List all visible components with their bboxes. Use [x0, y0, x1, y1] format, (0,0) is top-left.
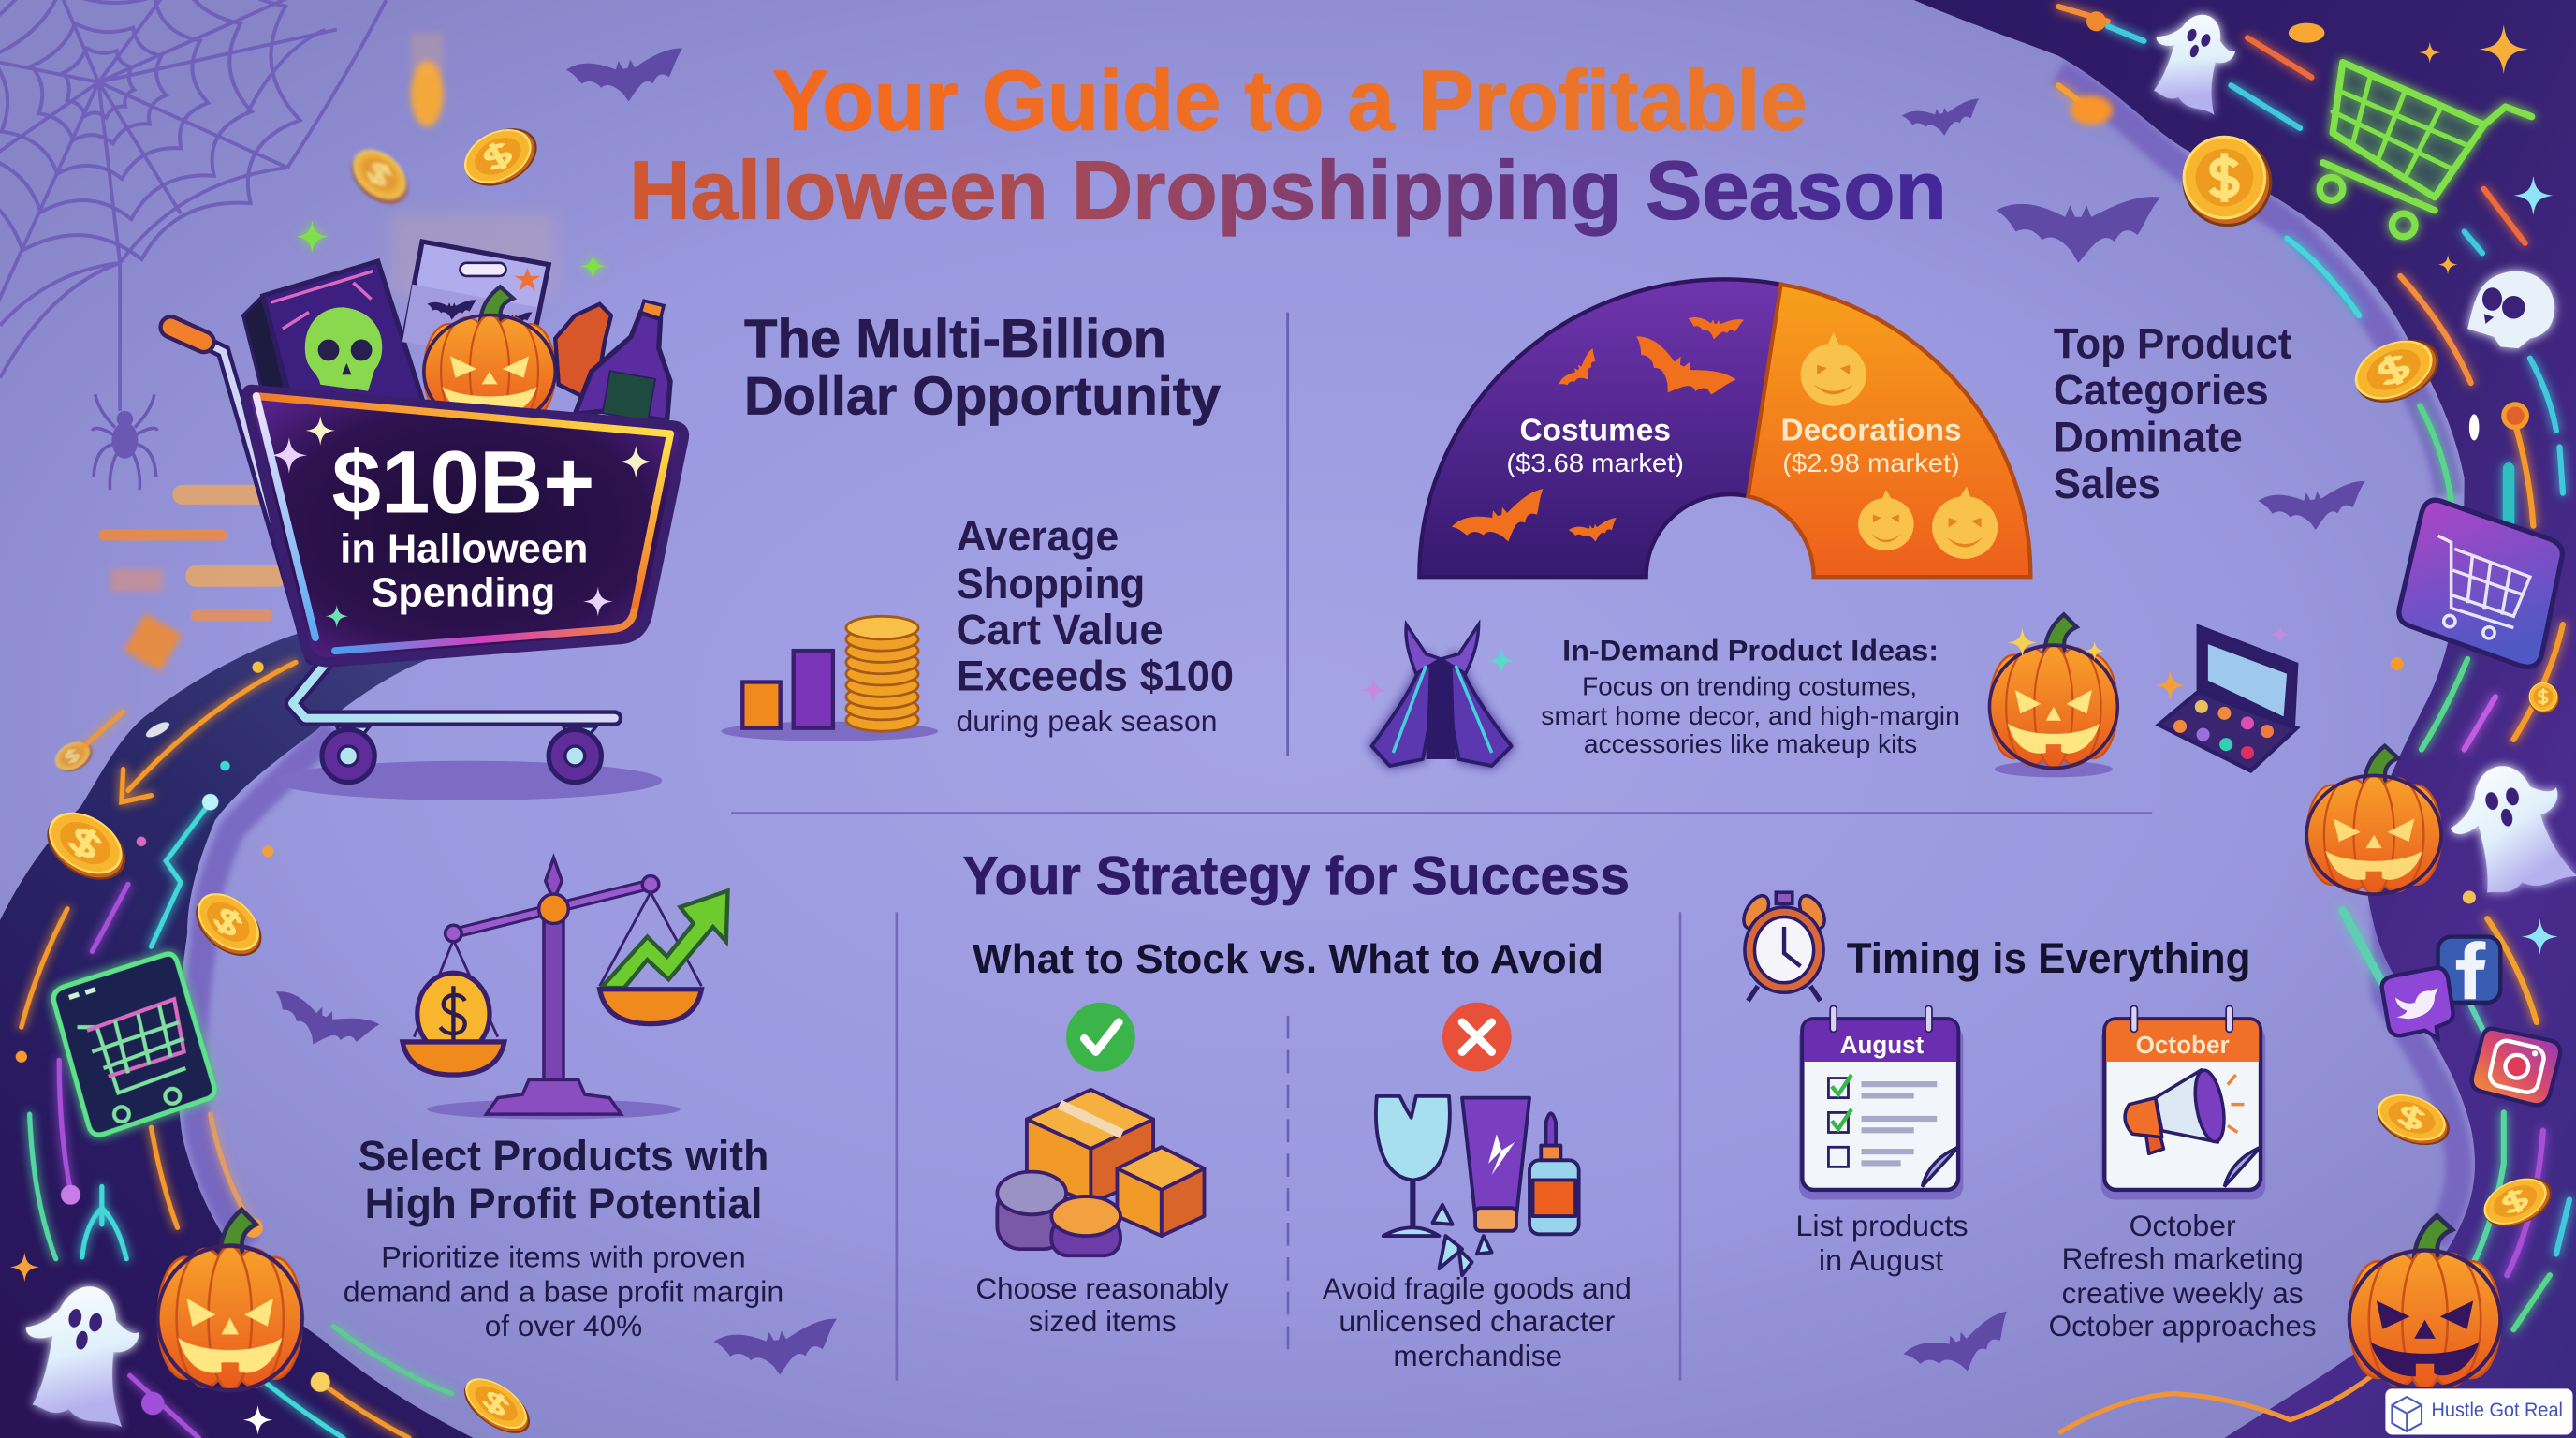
label: decorations: Decorations — [1781, 413, 1962, 448]
text: select products: of over 40% — [485, 1309, 642, 1343]
column dividers — [896, 912, 1681, 1381]
heading: timing: Timing is Everything — [1847, 934, 2250, 982]
stat: shopping cart value: during peak season — [956, 704, 1218, 738]
text: in-demand product ideas: Focus on trending costumes, — [1582, 672, 1917, 701]
cart contents — [243, 242, 670, 428]
calendar: august — [1799, 1005, 1963, 1199]
heading: strategy for success: Your Strategy for Success — [962, 846, 1630, 906]
speed lines — [98, 485, 287, 672]
heading: multi-billion opportunity: The Multi-Billion — [744, 309, 1166, 369]
text: choose reasonably: Choose reasonably — [976, 1271, 1229, 1305]
heading: top product categories: Categories — [2054, 366, 2269, 414]
text: select products: High Profit Potential — [365, 1180, 762, 1227]
icon: makeup palette — [2156, 624, 2297, 770]
text: in-demand product ideas: accessories like makeup kits — [1584, 729, 1917, 758]
stat: shopping cart value: Exceeds $100 — [956, 652, 1234, 699]
cart text: $10B+ — [332, 433, 594, 533]
pumpkin side decorations — [157, 746, 2500, 1390]
icon: vampire cape — [1360, 624, 1515, 766]
icon: bars and coin stack — [721, 616, 938, 741]
heading: top product categories: Sales — [2054, 460, 2160, 507]
text: select products: demand and a base profit margin — [344, 1274, 783, 1308]
text: in-demand product ideas — [1541, 634, 1960, 758]
title: Your Guide to a Profitable — [772, 53, 1808, 149]
inner halo of swirl — [194, 72, 2459, 1246]
stat: shopping cart value: Shopping — [956, 560, 1145, 608]
icon: red cross — [1442, 1003, 1512, 1072]
calendar: october: October — [2136, 1031, 2230, 1059]
icon: skull — [2467, 271, 2554, 348]
icon: neon green shopping cart — [2320, 63, 2532, 237]
icon: balance scale — [402, 858, 728, 1119]
icon: neon browser cart tile — [53, 954, 214, 1135]
horizontal divider — [731, 812, 2152, 814]
icon: jack-o-lantern — [1989, 614, 2117, 777]
green sparkles — [296, 220, 607, 279]
label: costumes: ($3.68 market) — [1506, 448, 1684, 477]
social icons — [2382, 937, 2560, 1105]
calendar: august: August — [1840, 1031, 1924, 1059]
text: october refresh: creative weekly as — [2062, 1276, 2304, 1310]
swirl dots — [16, 662, 330, 1415]
watermark — [2385, 1388, 2572, 1434]
cart text: Spending — [372, 570, 555, 616]
text: avoid fragile: unlicensed character — [1339, 1304, 1615, 1338]
text: avoid fragile: merchandise — [1393, 1339, 1562, 1372]
text: list products: List products — [1795, 1209, 1969, 1242]
icon: boxes and coin stacks — [997, 1090, 1204, 1255]
cart frame and wheels — [292, 664, 614, 783]
text: select products: Select Products with — [359, 1132, 768, 1180]
text: avoid fragile: Avoid fragile goods and — [1323, 1271, 1632, 1305]
label: decorations — [1781, 413, 1962, 477]
text: in-demand product ideas: smart home decor, and high-margin — [1541, 701, 1960, 730]
spider web — [0, 0, 394, 411]
text: october refresh: October approaches — [2049, 1309, 2317, 1343]
spider — [92, 394, 157, 490]
text: in-demand product ideas: In-Demand Product Ideas: — [1562, 634, 1939, 668]
text: choose reasonably: sized items — [1029, 1304, 1177, 1338]
label: costumes — [1506, 413, 1684, 477]
text: october refresh: October — [2130, 1209, 2236, 1242]
stat: shopping cart value — [956, 512, 1234, 738]
shopping cart hero — [171, 220, 684, 800]
text: october refresh: Refresh marketing — [2062, 1241, 2304, 1275]
label: decorations: ($2.98 market) — [1782, 448, 1960, 477]
icon: fragile and licensed goods — [1376, 1096, 1579, 1275]
heading: multi-billion opportunity — [744, 309, 1221, 426]
neon streaks top right — [2058, 7, 2569, 1329]
icon: green check — [1066, 1003, 1135, 1072]
cart shadow — [274, 761, 662, 800]
text: choose reasonably — [976, 1271, 1229, 1338]
calendar: october — [2101, 1005, 2265, 1199]
heading: top product categories — [2054, 320, 2291, 507]
decorative bats — [263, 48, 2369, 1388]
text: october refresh — [2049, 1209, 2317, 1343]
segment: costumes — [1419, 279, 1781, 577]
text: select products — [344, 1132, 783, 1343]
lower left neon streaks — [22, 662, 452, 1438]
label: costumes: Costumes — [1519, 413, 1671, 448]
icon: shop tile with cart — [2399, 500, 2562, 667]
text: list products — [1795, 1209, 1969, 1277]
icon: alarm clock — [1738, 891, 1830, 1001]
cart text: in Halloween — [340, 525, 588, 571]
watermark: Hustle Got Real — [2432, 1400, 2563, 1421]
cart basket — [246, 389, 684, 662]
heading: stock vs avoid: What to Stock vs. What to Avoid — [973, 936, 1603, 982]
cart text — [332, 433, 594, 616]
heading: top product categories: Top Product — [2054, 320, 2291, 368]
text: avoid fragile — [1323, 1271, 1632, 1372]
heading: top product categories: Dominate — [2054, 414, 2243, 462]
text: select products: Prioritize items with proven — [381, 1240, 746, 1273]
cart handle — [171, 327, 312, 657]
segment: decorations — [1748, 285, 2030, 577]
dashed divider — [1287, 1016, 1289, 1360]
title: Halloween Dropshipping Season — [629, 144, 1947, 236]
title — [629, 53, 1947, 236]
chart: category semi-donut — [1419, 279, 2030, 577]
text: list products: in August — [1819, 1243, 1944, 1277]
stat: shopping cart value: Average — [956, 512, 1119, 560]
orange bottom wave — [2058, 1375, 2372, 1433]
stat: shopping cart value: Cart Value — [956, 606, 1164, 653]
vertical divider top — [1286, 313, 1289, 756]
heading: multi-billion opportunity: Dollar Opportunity — [744, 366, 1221, 426]
